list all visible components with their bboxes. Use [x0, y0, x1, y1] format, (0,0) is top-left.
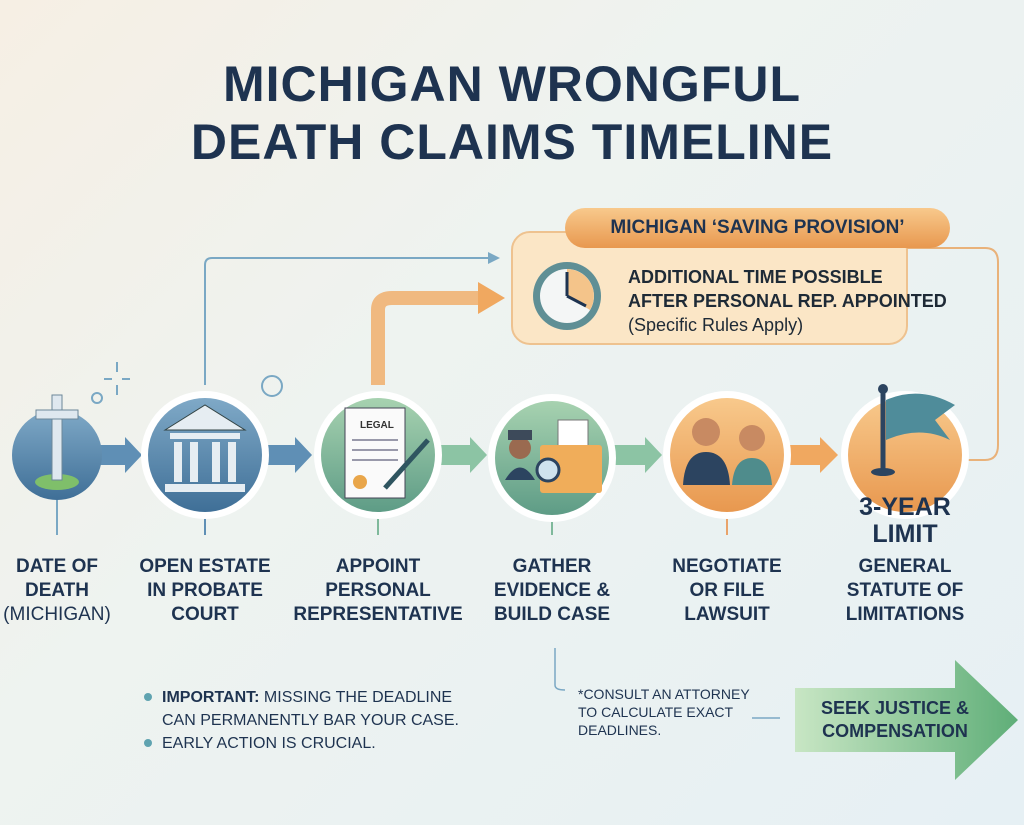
bullets	[144, 693, 152, 747]
orange thick arrow	[378, 282, 505, 385]
label 5: LAWSUIT	[684, 604, 770, 625]
panel body text: AFTER PERSONAL REP. APPOINTED	[628, 291, 947, 311]
label 3: REPRESENTATIVE	[293, 604, 463, 625]
label 3: APPOINT	[336, 556, 420, 577]
connector lines	[57, 500, 727, 535]
step arrows	[100, 437, 838, 473]
3-year limit: 3-YEAR	[859, 493, 951, 521]
blue path arrow	[205, 252, 500, 385]
important note	[162, 689, 459, 752]
label 1	[3, 556, 111, 625]
label 2: IN PROBATE	[147, 580, 263, 601]
decorative sparkles	[92, 362, 282, 403]
label 3: PERSONAL	[325, 580, 431, 601]
label 6	[846, 556, 964, 625]
label 3	[293, 556, 463, 625]
important note: EARLY ACTION IS CRUCIAL.	[162, 735, 376, 752]
step 5 icon: people	[663, 391, 791, 519]
step 3 icon: legal doc: LEGAL	[360, 420, 394, 431]
panel body text	[628, 267, 947, 335]
title: DEATH CLAIMS TIMELINE	[191, 114, 833, 170]
label 4: EVIDENCE &	[494, 580, 610, 601]
consult note: *CONSULT AN ATTORNEY	[578, 686, 750, 702]
arrow text: COMPENSATION	[822, 721, 968, 741]
step 4 icon: detective	[488, 394, 616, 522]
label 4: GATHER	[513, 556, 591, 577]
consult note	[578, 686, 750, 738]
consult note: DEADLINES.	[578, 722, 661, 738]
consult arrows	[555, 648, 780, 718]
label 6: STATUTE OF	[847, 580, 963, 601]
label 1: (MICHIGAN)	[3, 604, 111, 625]
label 2: COURT	[171, 604, 239, 625]
step 6 icon: flag	[841, 384, 969, 519]
3-year limit: LIMIT	[872, 520, 938, 548]
consult note: TO CALCULATE EXACT	[578, 704, 733, 720]
label 2: OPEN ESTATE	[139, 556, 271, 577]
label 2	[139, 556, 271, 625]
3-year limit	[859, 493, 951, 548]
label 1: DEATH	[25, 580, 89, 601]
step 1 icon: cross	[12, 395, 102, 500]
label 5: NEGOTIATE	[672, 556, 782, 577]
label 4: BUILD CASE	[494, 604, 610, 625]
label 5	[672, 556, 782, 625]
panel header text: MICHIGAN ‘SAVING PROVISION’	[610, 217, 905, 238]
panel body text: ADDITIONAL TIME POSSIBLE	[628, 267, 883, 287]
arrow text: SEEK JUSTICE &	[821, 698, 969, 718]
important note: IMPORTANT: MISSING THE DEADLINE	[162, 689, 452, 706]
title: MICHIGAN WRONGFUL	[223, 56, 801, 112]
step 3 icon: legal doc	[314, 391, 442, 519]
saving provision panel	[512, 208, 998, 460]
label 6: LIMITATIONS	[846, 604, 964, 625]
label 6: GENERAL	[859, 556, 951, 577]
label 1: DATE OF	[16, 556, 98, 577]
arrow text	[821, 698, 969, 741]
panel body text: (Specific Rules Apply)	[628, 315, 803, 335]
step 2 icon: courthouse	[141, 391, 269, 519]
title	[191, 56, 833, 170]
label 4	[494, 556, 610, 625]
important note: CAN PERMANENTLY BAR YOUR CASE.	[162, 712, 459, 729]
green big arrow	[795, 660, 1018, 780]
label 5: OR FILE	[690, 580, 764, 601]
